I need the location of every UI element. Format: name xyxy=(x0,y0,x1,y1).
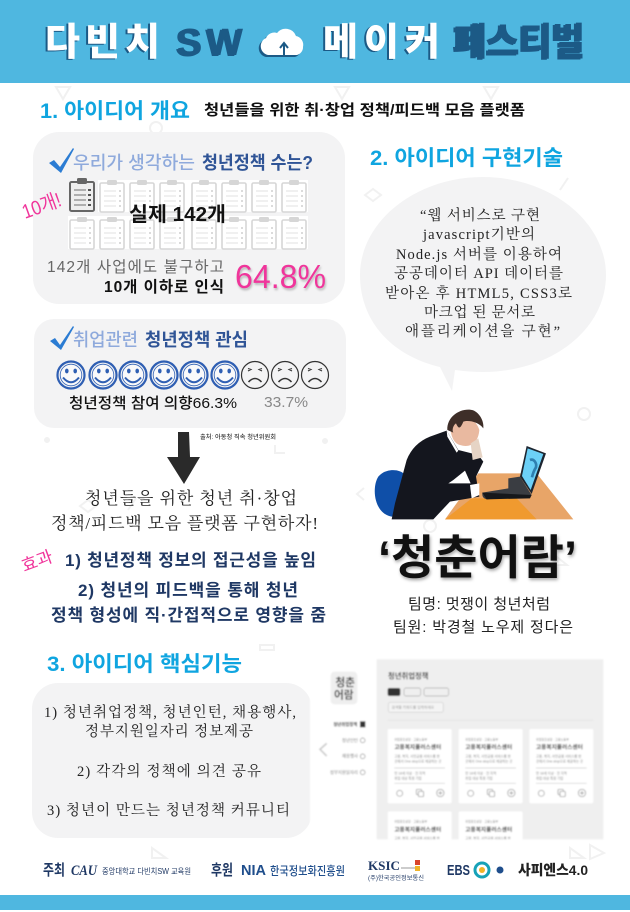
section 1 subtitle: 청년들을 위한 취·창업 정책/피드백 모음 플랫폼 xyxy=(204,102,525,119)
logo: host CAU: 주최 xyxy=(43,862,65,879)
statistic: 64.8%: 64.8% xyxy=(235,258,326,295)
bubble text xyxy=(385,206,572,340)
feature 1 xyxy=(44,703,296,740)
panel heading xyxy=(73,330,248,350)
feature 1: 1) 청년취업정책, 청년인턴, 채용행사, xyxy=(44,703,296,721)
app screenshot: 청년취업정책 xyxy=(388,672,429,681)
callout: actual 142: 실제 142개 xyxy=(129,203,226,226)
banner title xyxy=(45,22,585,64)
logo: host CAU xyxy=(43,862,191,879)
feature 1: 정부지원일자리 정보제공 xyxy=(85,722,253,740)
panel heading xyxy=(73,153,313,173)
footer logos xyxy=(43,858,588,882)
icon: check mark xyxy=(50,326,74,350)
team info: 팀명: 멋쟁이 청년처럼 xyxy=(408,596,550,613)
section 1 heading: 1. 아이디어 개요 xyxy=(40,100,190,123)
panel: policy count xyxy=(19,132,345,304)
logo: Sapiens 4.0: 사피엔스4.0 xyxy=(518,862,588,878)
panel: core features xyxy=(32,683,312,838)
bubble text: Node.js 서버를 이용하여 xyxy=(396,245,562,263)
bubble text: 공공데이터 API 데이터를 xyxy=(394,264,563,282)
footer bar xyxy=(0,895,630,910)
app screenshot: 청년인턴 xyxy=(342,737,358,743)
panel heading: 우리가 생각하는 xyxy=(73,153,195,173)
label: 33.7%: 33.7% xyxy=(264,394,308,411)
icon: check mark xyxy=(49,148,74,173)
banner title: SW xyxy=(177,22,243,64)
text: call to action: 정책/피드백 모음 플랫폼 구현하자! xyxy=(51,513,318,533)
logo: EBS xyxy=(447,862,504,879)
text: call to action: 청년들을 위한 청년 취·창업 xyxy=(85,488,297,508)
effects list: 정책 형성에 직·간접적으로 영향을 줌 xyxy=(51,606,326,625)
bubble text: 마크업 된 문서로 xyxy=(424,303,535,321)
panel heading: 청년정책 관심 xyxy=(145,330,248,350)
logo: KSIC xyxy=(368,858,424,882)
panel heading: 취업관련 xyxy=(73,330,138,350)
bubble text: 애플리케이션을 구현” xyxy=(405,322,560,340)
team name title: ‘청춘어람’ xyxy=(378,531,577,584)
logo: sponsor NIA: 한국정보화진흥원 xyxy=(270,863,345,878)
banner title: 다빈치 xyxy=(45,22,160,64)
icon: cloud upload xyxy=(259,29,303,57)
text: call to action xyxy=(51,488,318,533)
effects list: 2) 청년의 피드백을 통해 청년 xyxy=(78,581,298,600)
feature 2: 2) 각각의 정책에 의견 공유 xyxy=(77,762,261,780)
app screenshot: 어람 xyxy=(334,689,354,702)
source note: 출처: 아동청 직속 청년위원회 xyxy=(200,433,276,441)
text: despite 142 programs: 10개 이하로 인식 xyxy=(104,278,224,296)
panel: employment policy interest xyxy=(34,319,346,428)
banner title: 페스티벌 xyxy=(454,22,585,64)
text: despite 142 programs: 142개 사업에도 불구하고 xyxy=(47,258,224,276)
text: despite 142 programs xyxy=(47,258,224,296)
logo: host CAU: 중앙대학교 다빈치SW 교육원 xyxy=(102,866,191,876)
app screenshot: 청년취업정책 xyxy=(333,721,357,728)
handwritten note: effect: 효과 xyxy=(19,547,56,576)
feature 3: 3) 청년이 만드는 청년정책 커뮤니티 xyxy=(47,801,290,819)
speech bubble: technology xyxy=(360,177,606,391)
icon grid: clipboards xyxy=(68,178,308,249)
app screenshot: 청춘 xyxy=(335,676,355,689)
logo: KSIC: KSIC xyxy=(368,858,400,873)
logo: sponsor NIA: 후원 xyxy=(211,862,233,879)
bubble text: “웹 서비스로 구현 xyxy=(420,206,540,224)
logo: EBS: EBS xyxy=(447,862,470,879)
effects list xyxy=(51,551,326,625)
label: 66.3%: 청년정책 참여 의향66.3% xyxy=(69,395,237,412)
bubble text: 받아온 후 HTML5, CSS3로 xyxy=(385,284,572,302)
effects list: 1) 청년정책 정보의 접근성을 높임 xyxy=(65,551,316,570)
section 3 heading: 3. 아이디어 핵심기능 xyxy=(47,653,242,676)
app screenshot: 검색할 키워드를 입력하세요 xyxy=(392,705,435,710)
pictogram: smiley faces xyxy=(58,362,328,388)
app screenshot: 정부지원일자리 xyxy=(330,769,358,776)
arrow: down xyxy=(167,432,200,484)
section 2 heading: 2. 아이디어 구현기술 xyxy=(370,147,563,170)
app screenshot: 채용행사 xyxy=(342,753,358,760)
handwritten note: 10: 10개! xyxy=(19,188,64,224)
bubble text: javascript기반의 xyxy=(422,225,535,243)
team info xyxy=(393,596,573,636)
panel heading: 청년정책 수는? xyxy=(202,153,313,173)
header banner xyxy=(0,0,630,83)
team info: 팀원: 박경철 노우제 정다은 xyxy=(393,619,573,636)
app screenshot xyxy=(310,659,603,886)
logo: KSIC: (주)한국공인정보통신 xyxy=(368,874,424,882)
background pattern xyxy=(45,87,604,859)
banner title: 메이커 xyxy=(323,22,440,64)
logo: sponsor NIA xyxy=(211,862,345,879)
logo: host CAU: CAU xyxy=(71,863,98,879)
illustration: frustrated man at laptop xyxy=(375,410,573,519)
logo: sponsor NIA: NIA xyxy=(241,862,266,879)
